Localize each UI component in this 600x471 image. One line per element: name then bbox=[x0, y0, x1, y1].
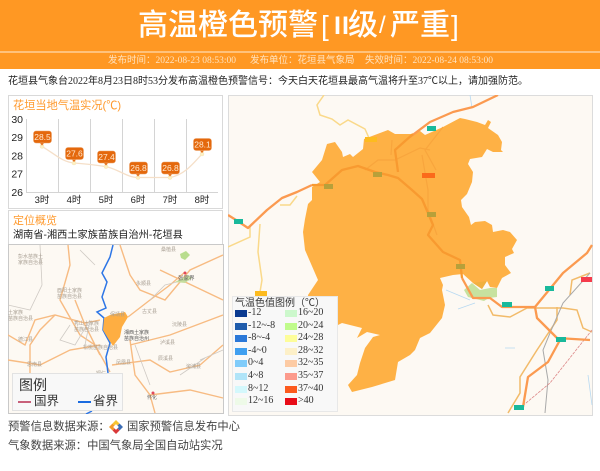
locator map: 铜仁 bbox=[96, 370, 106, 377]
line chart: 8时 bbox=[195, 194, 210, 206]
map legend bbox=[12, 373, 123, 411]
locator map: 苗族自治县 bbox=[8, 315, 33, 322]
locator map: 泸溪县 bbox=[160, 339, 175, 346]
colour swatches left: -8~-4 bbox=[248, 332, 270, 343]
locator map: 古丈县 bbox=[142, 308, 157, 315]
title: II bbox=[334, 12, 350, 40]
highways bbox=[228, 95, 592, 407]
locator map: 溆浦县 bbox=[186, 363, 201, 370]
locator map: 怀化 bbox=[147, 394, 157, 401]
location path: 湖南省-湘西土家族苗族自治州-花垣县 bbox=[13, 230, 183, 241]
line chart bbox=[11, 114, 218, 206]
header banner: 发布单位：花垣县气象局 bbox=[250, 56, 355, 66]
locator map: 酉阳土家族 bbox=[57, 287, 82, 294]
line chart: 27 bbox=[11, 168, 23, 180]
source line two: 气象数据来源：中国气象局全国自动站实况 bbox=[8, 440, 223, 452]
line chart: 30 bbox=[11, 114, 23, 126]
secondary roads bbox=[228, 95, 369, 292]
colour swatches right: 16~20 bbox=[298, 307, 323, 318]
line chart: 26.8 bbox=[130, 163, 147, 173]
colour swatches right: 28~32 bbox=[298, 345, 323, 356]
locator map: 家族自治县 bbox=[18, 259, 43, 266]
colour swatches left bbox=[235, 307, 275, 406]
header banner bbox=[0, 0, 600, 69]
legend title: 图例 bbox=[19, 377, 47, 393]
colour swatches right bbox=[285, 307, 324, 406]
line chart: 26 bbox=[11, 187, 23, 199]
line chart: 4时 bbox=[67, 194, 82, 206]
location heading: 定位概览 bbox=[13, 215, 57, 227]
colour swatches left: 12~16 bbox=[248, 395, 273, 406]
issue info line: 发布时间：2022-08-23 08:53:00 bbox=[108, 56, 236, 66]
colour swatches right: 20~24 bbox=[298, 320, 323, 331]
title: 高温橙色预警 bbox=[138, 9, 318, 42]
panel: location overview bbox=[8, 210, 223, 245]
colour swatches left: 0~4 bbox=[248, 357, 263, 368]
locator map: 永顺县 bbox=[136, 280, 151, 287]
line chart: 28.5 bbox=[34, 132, 51, 142]
colour swatches left: -12 bbox=[248, 307, 261, 318]
locator map: 湘西土家族 bbox=[124, 329, 149, 336]
colour swatches right: 35~37 bbox=[298, 370, 323, 381]
locator map: 土家族 bbox=[8, 309, 23, 316]
railway bbox=[543, 273, 590, 413]
line chart: 5时 bbox=[99, 194, 114, 206]
locator map: 思南县 bbox=[27, 361, 42, 368]
national border key: 国界 bbox=[34, 394, 59, 408]
title bbox=[138, 9, 459, 42]
locator map: 凤凰县 bbox=[116, 360, 131, 366]
locator map: 桑植县 bbox=[161, 246, 176, 253]
line chart: 28 bbox=[11, 150, 23, 162]
locator map: 松桃苗族自治县 bbox=[83, 344, 118, 351]
locator map: 苗族自治州 bbox=[124, 335, 149, 342]
high temperature area bbox=[303, 118, 517, 392]
locator map bbox=[8, 244, 224, 414]
colour swatches right: 24~28 bbox=[298, 332, 323, 343]
title: / bbox=[379, 12, 386, 39]
temperature colour legend bbox=[232, 296, 338, 412]
legend heading: 气温色值图例（℃） bbox=[235, 298, 325, 309]
locator map: 保靖县 bbox=[110, 311, 125, 318]
colour swatches left: 4~8 bbox=[248, 370, 263, 381]
province border key: 省界 bbox=[93, 394, 118, 408]
colour swatches right: 37~40 bbox=[298, 383, 323, 394]
locator map: 德江县 bbox=[18, 336, 33, 343]
title: 严重 bbox=[390, 9, 450, 42]
colour swatches left: -12~-8 bbox=[248, 320, 275, 331]
title: [ bbox=[321, 10, 329, 41]
line chart: 27.6 bbox=[66, 148, 83, 158]
line chart: 6时 bbox=[131, 194, 146, 206]
colour swatches right: >40 bbox=[298, 395, 314, 406]
locator map: 辰溪县 bbox=[158, 355, 173, 362]
header banner: 失效时间：2022-08-24 08:53:00 bbox=[365, 56, 493, 66]
line chart: 3时 bbox=[35, 194, 50, 206]
line chart: 28.1 bbox=[194, 140, 211, 150]
warning text: 花垣县气象台2022年8月23日8时53分发布高温橙色预警信号：今天白天花垣县最高气温将升至37℃以上，请加强防范。 bbox=[8, 76, 528, 87]
locator map: 秀山土家族 bbox=[74, 320, 99, 327]
title: 级 bbox=[348, 9, 378, 42]
locator map: 沅陵县 bbox=[172, 321, 187, 328]
line chart: 7时 bbox=[163, 194, 178, 206]
main county map bbox=[228, 95, 593, 416]
locator map: 彭水苗族土 bbox=[18, 253, 43, 260]
locator map: 苗族自治县 bbox=[74, 326, 99, 333]
national border bbox=[520, 330, 592, 408]
source line one: 预警信息数据来源： bbox=[8, 421, 110, 433]
colour swatches right: 32~35 bbox=[298, 357, 323, 368]
road shields bbox=[234, 126, 592, 410]
line chart: 27.4 bbox=[98, 152, 115, 162]
locator map: 苗族自治县 bbox=[57, 293, 82, 300]
panel heading: 花垣当地气温实况(℃) bbox=[13, 100, 121, 112]
line chart: 29 bbox=[11, 132, 23, 144]
source organisation: 国家预警信息发布中心 bbox=[127, 421, 240, 433]
icon: warning centre logo bbox=[109, 420, 123, 434]
panel: local temperature bbox=[8, 95, 223, 209]
locator map: 张家界 bbox=[178, 274, 195, 282]
colour swatches left: 8~12 bbox=[248, 383, 268, 394]
line chart: 26.8 bbox=[162, 163, 179, 173]
title: ] bbox=[451, 10, 459, 41]
colour swatches left: -4~0 bbox=[248, 345, 267, 356]
